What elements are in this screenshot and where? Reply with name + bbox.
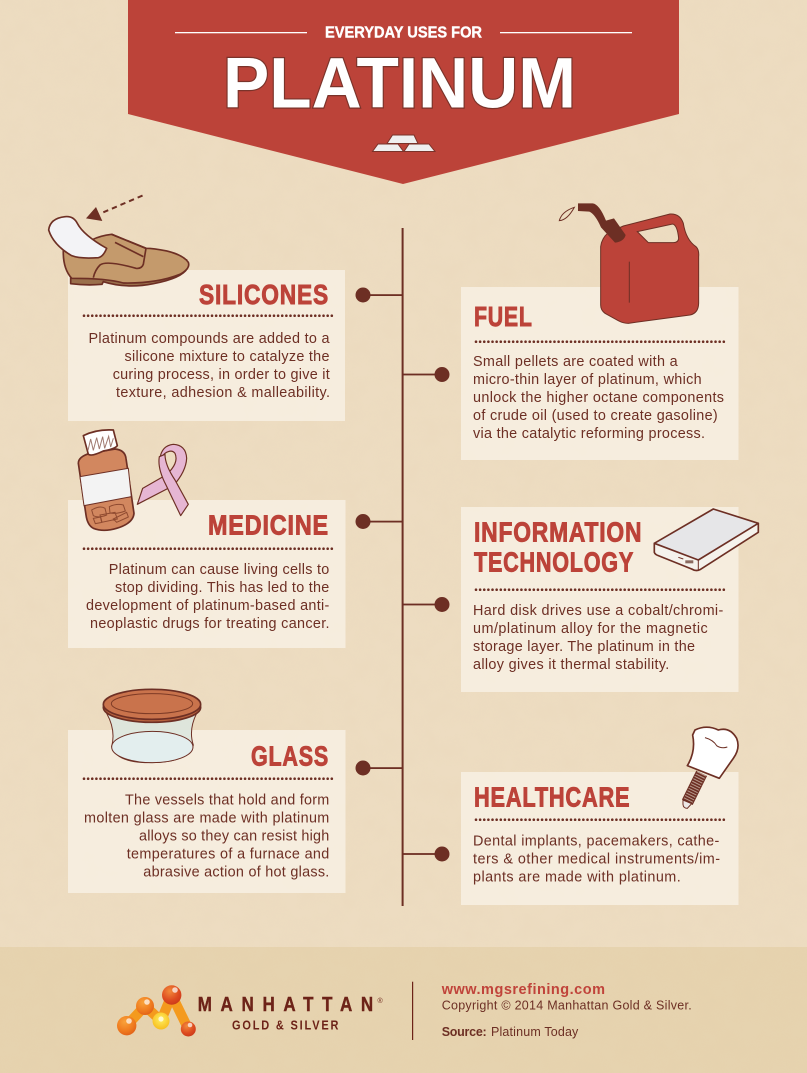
text: fuel description xyxy=(473,354,724,442)
footer credits: Source: xyxy=(442,1025,487,1039)
text: medicine description xyxy=(86,562,330,632)
text: medicine description: neoplastic drugs for treating cancer. xyxy=(90,616,330,632)
icon: hard disk drive xyxy=(654,509,758,571)
icon: awareness ribbon xyxy=(137,444,188,516)
header kicker: Everyday uses for: EVERYDAY USES FOR xyxy=(325,24,482,42)
panel: information technology xyxy=(461,507,738,692)
footer logo: Manhattan Gold & Silver: GOLD & SILVER xyxy=(232,1019,339,1033)
heading: medicine: MEDICINE xyxy=(208,510,329,540)
icon: pill bottle and ribbon xyxy=(78,430,188,530)
text: fuel description: unlock the higher octane components xyxy=(473,390,724,406)
text: silicones description: silicone mixture to catalyze the xyxy=(124,349,330,365)
heading: fuel: FUEL xyxy=(474,301,533,332)
text: medicine description: development of platinum-based anti- xyxy=(86,598,330,614)
text: fuel description: of crude oil (used to create gasoline) xyxy=(473,408,718,424)
footer divider xyxy=(412,982,413,1040)
panel: healthcare xyxy=(461,772,738,905)
footer credits: Copyright © 2014 Manhattan Gold & Silver. xyxy=(442,998,692,1012)
icon: platinum bars xyxy=(372,135,435,152)
text: healthcare description: Dental implants, pacemakers, cathe- xyxy=(473,834,720,850)
text: fuel description: micro-thin layer of platinum, which xyxy=(473,372,702,388)
icon: shoe with insole xyxy=(49,194,189,286)
heading: glass: GLASS xyxy=(251,740,329,772)
footer logo: Manhattan Gold & Silver: MANHATTAN xyxy=(198,993,373,1015)
text: silicones description: Platinum compounds are added to a xyxy=(88,331,330,347)
icon: molecule logo mark xyxy=(117,985,196,1036)
heading: information technology xyxy=(474,517,642,578)
text: information technology description xyxy=(473,603,724,673)
text: healthcare description: plants are made with platinum. xyxy=(473,870,681,886)
text: glass description: alloys so they can resist high xyxy=(139,828,329,844)
text: information technology description: um/platinum alloy for the magnetic xyxy=(473,621,708,637)
footer logo: Manhattan Gold & Silver: ® xyxy=(378,997,384,1005)
panel: medicine xyxy=(68,500,346,648)
heading: silicones: SILICONES xyxy=(199,279,329,310)
icon: dental implant xyxy=(683,727,738,808)
text: information technology description: storage layer. The platinum in the xyxy=(473,639,695,655)
text: glass description: molten glass are made with platinum xyxy=(84,810,329,826)
text: glass description: temperatures of a furnace and xyxy=(127,846,329,862)
footer credits: www.mgsrefining.com xyxy=(441,982,605,998)
heading: information technology: INFORMATION xyxy=(474,517,642,548)
text: healthcare description: ters & other medical instruments/im- xyxy=(473,852,720,868)
central timeline xyxy=(356,228,450,906)
panel: fuel xyxy=(461,287,738,460)
panel: silicones xyxy=(68,270,345,421)
text: healthcare description xyxy=(473,834,720,886)
text: silicones description: curing process, in order to give it xyxy=(113,367,330,383)
footer credits xyxy=(441,982,692,1039)
text: information technology description: Hard disk drives use a cobalt/chromi- xyxy=(473,603,724,619)
text: silicones description xyxy=(88,331,330,401)
text: medicine description: Platinum can cause living cells to xyxy=(109,562,329,578)
footer credits: Platinum Today xyxy=(491,1025,579,1039)
text: information technology description: alloy gives it thermal stability. xyxy=(473,657,669,673)
text: fuel description: via the catalytic reforming process. xyxy=(473,426,705,442)
header banner xyxy=(128,0,679,184)
heading: healthcare: HEALTHCARE xyxy=(474,782,630,813)
heading: information technology: TECHNOLOGY xyxy=(474,547,634,578)
panel: glass xyxy=(68,730,346,893)
icon: glass vessel with lid xyxy=(103,689,201,763)
title: Platinum: PLATINUM xyxy=(223,44,576,124)
text: glass description xyxy=(84,792,329,880)
icon: fuel can xyxy=(559,203,699,323)
text: medicine description: stop dividing. This has led to the xyxy=(115,580,329,596)
footer logo: Manhattan Gold & Silver xyxy=(117,985,384,1036)
text: fuel description: Small pellets are coated with a xyxy=(473,354,678,370)
text: silicones description: texture, adhesion & malleability. xyxy=(116,385,330,401)
text: glass description: abrasive action of hot glass. xyxy=(143,864,329,880)
icon: pill bottle xyxy=(78,430,134,530)
text: glass description: The vessels that hold and form xyxy=(125,792,329,808)
